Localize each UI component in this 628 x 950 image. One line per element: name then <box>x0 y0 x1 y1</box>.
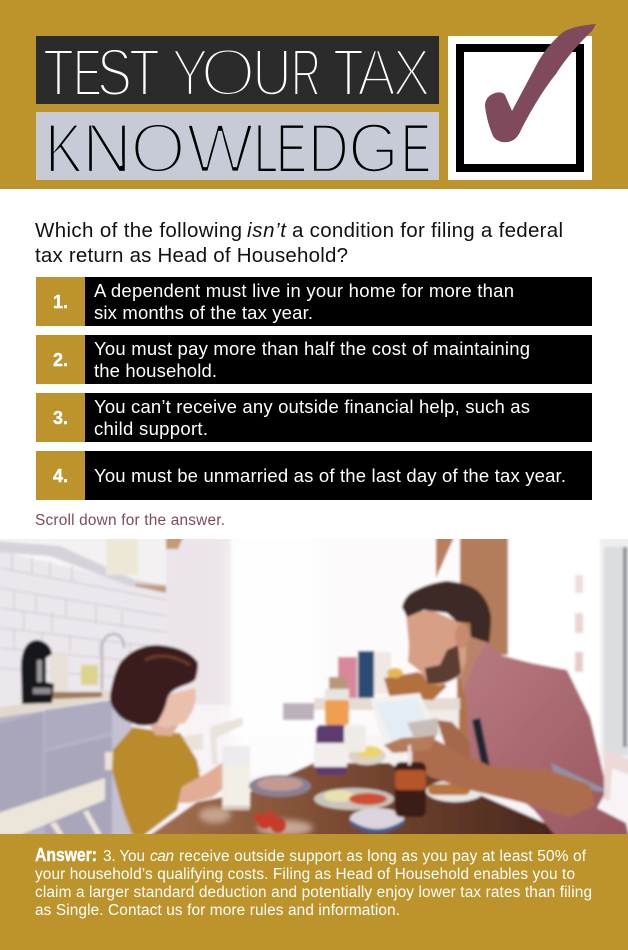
question heading: a condition for filing a federal <box>292 219 563 242</box>
jam jar purple <box>314 725 347 775</box>
upper cabinets <box>0 535 166 585</box>
answer option 2: You must pay more than half the cost of maintaining <box>94 338 530 359</box>
title line 1: TEST YOUR TAX: S <box>97 37 132 111</box>
answer text: 3. You <box>103 848 145 865</box>
answer text: can <box>150 848 174 865</box>
answer option 4: 4. <box>53 466 68 486</box>
title line 1: TEST YOUR TAX: X <box>392 37 431 111</box>
answer option 3: You can’t receive any outside financial help, such as <box>94 396 530 417</box>
title line 1: TEST YOUR TAX: U <box>252 37 292 111</box>
answer option 1 <box>36 277 592 326</box>
answer option 3: 3. <box>53 408 68 428</box>
coffee machine <box>21 640 54 704</box>
title line 1: TEST YOUR TAX: O <box>200 37 256 111</box>
man's neck <box>459 634 486 690</box>
title line 2: KNOWLEDGE: W <box>186 109 255 188</box>
answer option 3: child support. <box>94 418 208 439</box>
dining table <box>143 763 570 840</box>
scroll prompt: Scroll down for the answer. <box>35 512 225 529</box>
title line 2: KNOWLEDGE: K <box>45 109 83 188</box>
laptop <box>370 693 432 767</box>
title line 2: KNOWLEDGE: E <box>401 109 431 188</box>
answer option 2: the household. <box>94 360 217 381</box>
child <box>110 645 225 836</box>
answer text: receive outside support as long as you pay at least 50% of <box>179 848 587 865</box>
lower cabinets <box>0 710 114 834</box>
title line 2: KNOWLEDGE: E <box>276 109 307 188</box>
foreground chair <box>0 778 105 835</box>
answer option 2 <box>36 335 592 384</box>
answer option 1: A dependent must live in your home for more than <box>94 280 514 301</box>
answer text <box>35 845 592 919</box>
title line 1: TEST YOUR TAX: E <box>73 37 102 111</box>
photo: father and child at breakfast table <box>0 535 628 840</box>
back counter and groceries <box>314 698 460 710</box>
answer text: as Single. Contact us for more rules and information. <box>35 902 400 919</box>
question heading: tax return as Head of Household? <box>35 244 348 267</box>
answer option 1: 1. <box>53 292 68 312</box>
title line 2: KNOWLEDGE: D <box>308 109 349 188</box>
tomatoes <box>254 811 286 833</box>
answer option 1: six months of the tax year. <box>94 302 313 323</box>
window frame and wood column <box>600 535 628 760</box>
man's arm and hand <box>412 720 595 817</box>
question heading: Which of the following <box>35 219 242 242</box>
title line 2: KNOWLEDGE: O <box>130 109 186 188</box>
jam jar red <box>395 745 426 817</box>
title line 1: TEST YOUR TAX: Y <box>171 37 209 111</box>
man's head <box>402 581 491 686</box>
title line 1: TEST YOUR TAX: T <box>129 37 159 111</box>
countertop <box>0 690 112 718</box>
faucet and counter items <box>102 634 124 690</box>
title line 1: TEST YOUR TAX: R <box>291 37 321 111</box>
toast and cup <box>384 718 438 753</box>
question heading: isn’t <box>247 219 287 242</box>
title line 1: TEST YOUR TAX <box>36 36 439 111</box>
answer text: Answer: <box>35 845 97 865</box>
title line 2: KNOWLEDGE: L <box>254 109 278 188</box>
title line 1: TEST YOUR TAX: T <box>43 37 74 111</box>
plates and food <box>249 746 484 810</box>
answer band <box>0 834 628 950</box>
kitchen wall and tiles <box>0 539 230 707</box>
glass of milk <box>222 746 250 810</box>
right chair <box>604 748 628 800</box>
icon: checkbox with check mark <box>448 24 596 180</box>
title line 1: TEST YOUR TAX: T <box>333 37 364 111</box>
answer text: your household’s qualifying costs. Filing as Head of Household enables you to <box>35 866 575 883</box>
title line 2: KNOWLEDGE: N <box>82 109 132 188</box>
header band <box>0 0 628 189</box>
back chairs <box>283 703 314 720</box>
title line 2: KNOWLEDGE <box>36 109 439 188</box>
man's shirt and body <box>464 642 628 840</box>
answer option 4 <box>36 451 592 500</box>
answer option 3 <box>36 393 592 442</box>
answer option 2: 2. <box>53 350 68 370</box>
answer option 4: You must be unmarried as of the last day of the tax year. <box>94 465 566 486</box>
window glow <box>246 737 306 760</box>
answer text: claim a larger standard deduction and potentially enjoy lower tax rates than filing <box>35 884 592 901</box>
title line 2: KNOWLEDGE: G <box>348 109 399 188</box>
question heading <box>35 219 563 267</box>
title line 1: TEST YOUR TAX: A <box>357 37 397 111</box>
tin <box>350 808 404 830</box>
